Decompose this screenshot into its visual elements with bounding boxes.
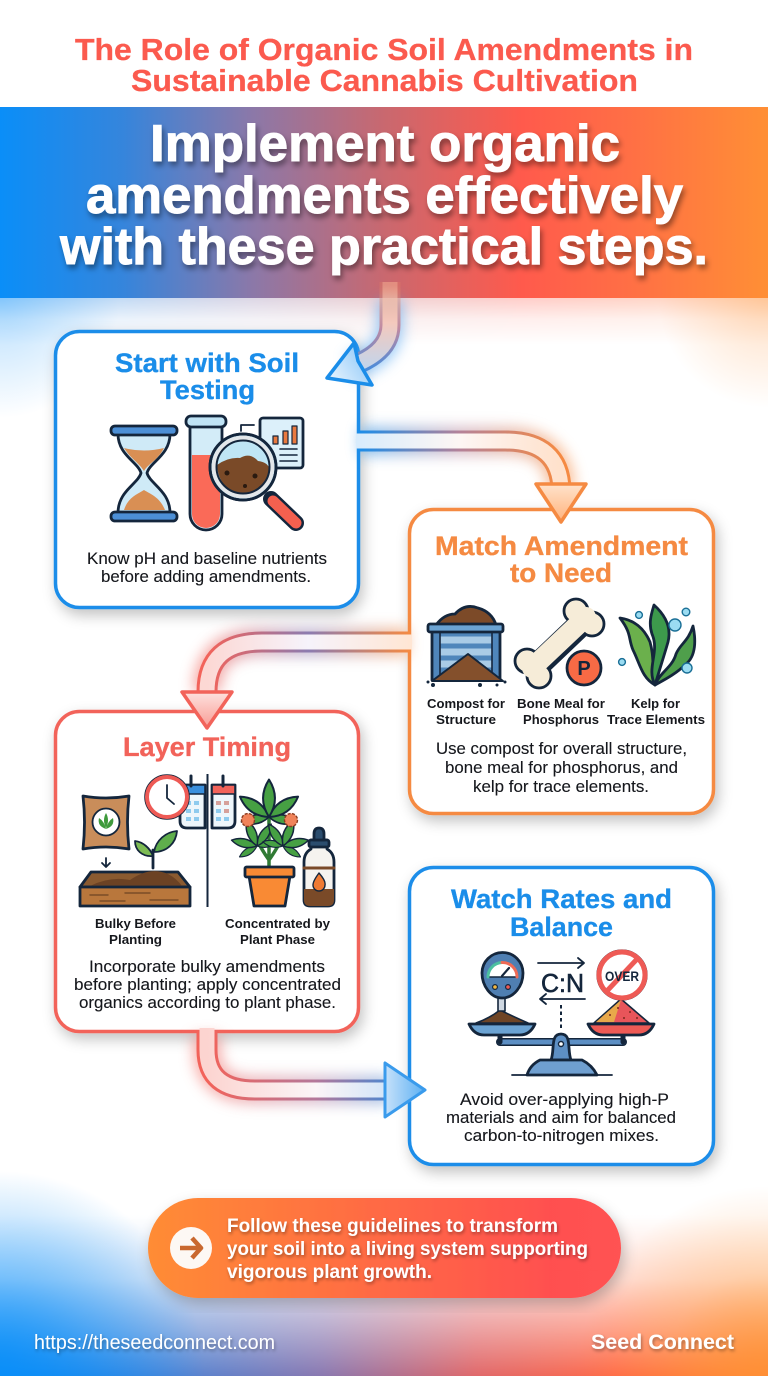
icon: dropper bottle	[304, 828, 334, 906]
icon: test tube	[186, 416, 226, 530]
arrow: soil testing to match amendment	[356, 441, 586, 522]
body text: kelp for trace elements.	[473, 778, 649, 796]
icon: magnifying glass with soil	[210, 434, 296, 523]
banner headline: with these practical steps.	[59, 218, 708, 276]
glow below banner	[0, 298, 768, 404]
icon labels: Planting	[109, 932, 162, 947]
body text: organics according to plant phase.	[79, 994, 336, 1012]
icon labels	[427, 696, 705, 727]
icon: clock and calendar	[145, 775, 235, 828]
title: Sustainable Cannabis Cultivation	[131, 63, 638, 98]
footer brand: Seed Connect	[591, 1331, 734, 1354]
title: The Role of Organic Soil Amendments in	[75, 32, 693, 67]
icon labels: Phosphorus	[523, 712, 599, 727]
icon: C:N ratio: C:N	[541, 968, 584, 998]
arrow: match amendment to layer timing	[182, 642, 412, 728]
callout text: your soil into a living system supporting	[227, 1239, 588, 1260]
heading	[451, 884, 672, 942]
icon labels: Kelp for	[631, 696, 680, 711]
callout: closing guidance	[148, 1198, 621, 1298]
icon labels: Trace Elements	[607, 712, 705, 727]
icon: raised bed with seedling	[80, 831, 190, 906]
callout pill	[148, 1198, 621, 1298]
body text	[87, 550, 327, 586]
body text	[446, 1091, 676, 1145]
body text: bone meal for phosphorus, and	[445, 759, 678, 777]
banner headline: Implement organic	[150, 115, 620, 173]
body text: before adding amendments.	[101, 568, 311, 586]
bottom gradient wash	[0, 1170, 768, 1376]
heading	[435, 531, 688, 588]
body text: Know pH and baseline nutrients	[87, 550, 327, 568]
banner headline: amendments effectively	[86, 167, 683, 225]
icon: amendment bag	[83, 796, 129, 867]
icon labels	[95, 916, 331, 947]
callout text: vigorous plant growth.	[227, 1262, 432, 1283]
heading: to Need	[510, 558, 612, 588]
heading: Watch Rates and	[451, 884, 672, 914]
heading: Testing	[160, 375, 255, 405]
card frame	[410, 868, 714, 1164]
divider	[206, 774, 208, 907]
card frame	[56, 332, 358, 608]
icon labels: Concentrated by	[225, 916, 331, 931]
heading	[115, 348, 299, 405]
footer url: https://theseedconnect.com	[34, 1332, 275, 1354]
panel: start with soil testing	[56, 332, 358, 608]
icon labels: Bone Meal for	[517, 696, 605, 711]
arrow: banner to soil testing	[327, 282, 390, 385]
heading: Match Amendment	[435, 531, 688, 561]
panel: match amendment to need	[410, 510, 714, 814]
body text: Use compost for overall structure,	[436, 740, 687, 758]
icon: data chart	[241, 418, 303, 468]
heading: Layer Timing	[123, 732, 291, 762]
card frame	[410, 510, 714, 814]
title	[75, 32, 693, 98]
icon labels: Compost for	[427, 696, 505, 711]
callout text	[227, 1216, 588, 1283]
icon: bone with phosphorus badge	[515, 599, 604, 688]
body text	[74, 958, 341, 1012]
icon: soil gauge	[482, 952, 523, 1011]
icon: C:N ratio	[538, 958, 585, 1030]
icon: no over-application sign	[597, 950, 647, 1000]
banner	[0, 107, 768, 298]
panel: watch rates and balance	[410, 868, 714, 1164]
icon labels: Plant Phase	[240, 932, 315, 947]
icon: no over-application sign: OVER	[605, 969, 639, 984]
banner headline	[59, 115, 708, 276]
icon: arrow in circle	[170, 1227, 212, 1269]
body text: Incorporate bulky amendments	[89, 958, 325, 976]
icon: compost bin	[426, 606, 506, 687]
icon: cannabis plant in pot	[225, 780, 315, 906]
body text: materials and aim for balanced	[446, 1109, 676, 1127]
icon: bone with phosphorus badge: P	[577, 658, 591, 680]
heading: Start with Soil	[115, 348, 299, 378]
body text: Avoid over-applying high-P	[460, 1091, 669, 1109]
icon: balance scale	[469, 999, 654, 1075]
heading: Balance	[510, 912, 613, 942]
icon labels: Bulky Before	[95, 916, 176, 931]
panel: layer timing	[56, 712, 358, 1032]
body text	[436, 740, 687, 796]
icon: kelp	[619, 605, 695, 685]
icon labels: Structure	[436, 712, 496, 727]
callout text: Follow these guidelines to transform	[227, 1216, 558, 1237]
icon: hourglass	[111, 426, 177, 521]
body text: before planting; apply concentrated	[74, 976, 341, 994]
arrow: layer timing to watch rates	[207, 1028, 425, 1117]
body text: carbon-to-nitrogen mixes.	[464, 1127, 659, 1145]
card frame	[56, 712, 358, 1032]
